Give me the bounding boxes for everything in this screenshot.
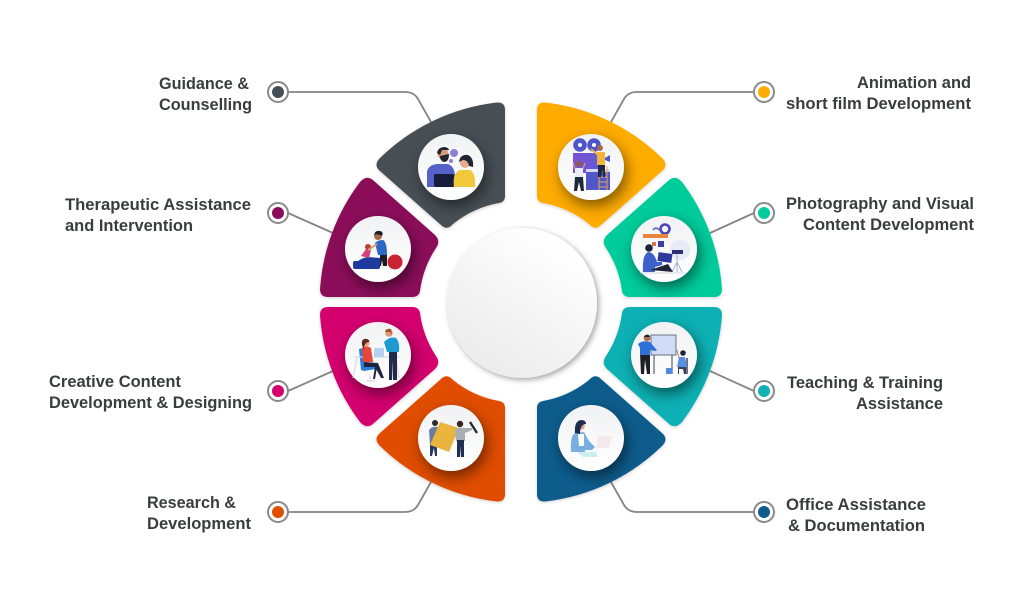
label: Office Assistance & Documentation	[786, 495, 926, 535]
icon: teacher at whiteboard	[638, 335, 688, 374]
marker: Animation	[754, 82, 774, 102]
marker: Office	[754, 502, 774, 522]
connector: Office Assistance	[611, 482, 754, 512]
label: Research & Development: Research &	[147, 493, 236, 512]
label: Therapeutic Assistance and Intervention: Therapeutic Assistance	[65, 195, 251, 214]
label: Photography and Visual Content Development: Photography and Visual	[786, 194, 974, 213]
label: Guidance & Counselling: Counselling	[159, 95, 252, 114]
label: Animation and short film Development: Animation and	[857, 73, 971, 92]
label: Teaching & Training Assistance: Assistance	[856, 394, 943, 413]
label: Animation and short film Development	[786, 73, 971, 113]
panel: Teaching segment	[604, 307, 722, 426]
label: Creative Content Development & Designing	[49, 372, 252, 412]
label: Research & Development: Development	[147, 514, 251, 533]
label: Animation and short film Development: short film Development	[786, 94, 971, 113]
marker: Therapeutic	[268, 203, 288, 223]
label: Therapeutic Assistance and Intervention	[65, 195, 251, 235]
panel: Animation segment	[537, 102, 666, 228]
center hub circle	[447, 228, 597, 378]
label: Teaching & Training Assistance	[787, 373, 943, 413]
panel: Creative Content segment	[320, 307, 438, 426]
label: Photography and Visual Content Development: Content Development	[803, 215, 974, 234]
marker: Photography	[754, 203, 774, 223]
label: Photography and Visual Content Development	[786, 194, 974, 234]
icon: counselling people	[427, 147, 475, 187]
icon: designers at desk	[353, 329, 399, 381]
connector: Animation	[611, 92, 754, 122]
connector: Photography	[710, 213, 754, 233]
label: Guidance & Counselling	[159, 74, 252, 114]
panel: Therapeutic segment	[320, 178, 438, 297]
panel: Photography segment	[604, 178, 722, 297]
connector: Therapeutic Assistance	[288, 213, 333, 233]
panel: Research segment	[376, 376, 505, 502]
connector: Creative Content	[288, 371, 333, 391]
label: Creative Content Development & Designing: Development & Designing	[49, 393, 252, 412]
icon: film production	[573, 138, 610, 191]
label: Creative Content Development & Designing: Creative Content	[49, 372, 181, 391]
panel: Office Assistance segment	[537, 376, 666, 502]
label: Office Assistance & Documentation: & Documentation	[788, 516, 925, 535]
icon: therapy session	[353, 231, 402, 270]
marker: Creative	[268, 381, 288, 401]
icon: photographer at laptop	[640, 224, 690, 273]
connector: Guidance & Counselling	[288, 92, 431, 122]
label: Office Assistance & Documentation: Office Assistance	[786, 495, 926, 514]
label: Research & Development	[147, 493, 251, 533]
connector: Research & Development	[288, 482, 431, 512]
connector: Teaching	[710, 371, 754, 391]
label: Therapeutic Assistance and Intervention: and Intervention	[65, 216, 193, 235]
panel: Guidance segment	[376, 102, 505, 228]
label: Guidance & Counselling: Guidance &	[159, 74, 249, 93]
marker: Teaching	[754, 381, 774, 401]
marker: Guidance	[268, 82, 288, 102]
marker: Research	[268, 502, 288, 522]
icon: office worker at laptop	[571, 420, 612, 457]
label: Teaching & Training Assistance: Teaching & Training	[787, 373, 943, 392]
icon: researchers with envelope	[429, 420, 477, 457]
